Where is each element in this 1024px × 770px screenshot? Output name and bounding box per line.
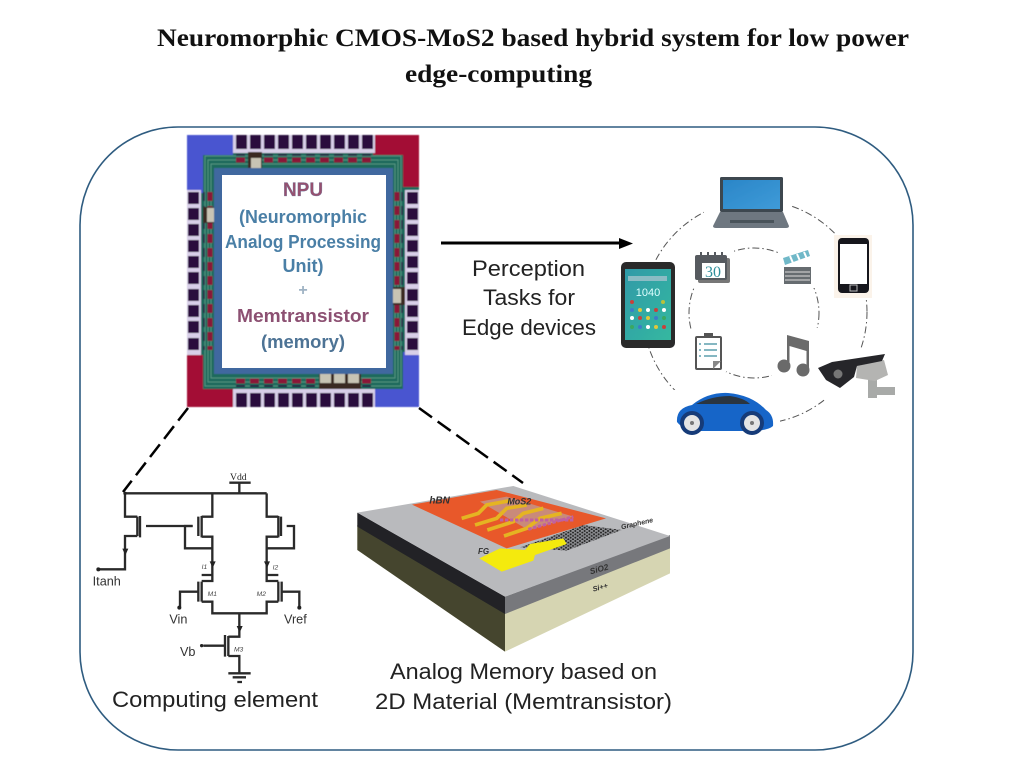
text: plus: + <box>298 282 308 299</box>
labels: I1 <box>202 564 208 571</box>
labels: M2 <box>257 591 266 598</box>
MoS2 array <box>462 497 573 536</box>
icon: tablet: 1040 <box>636 287 660 299</box>
wires <box>125 483 267 493</box>
dashed zoom line: to memtransistor <box>419 408 523 483</box>
icon: calendar: 30 <box>705 264 721 281</box>
text: neuromorphic analog processing unit <box>225 207 381 276</box>
top surface <box>357 486 670 597</box>
device labels: Graphene <box>621 517 654 531</box>
silicon substrate <box>357 513 670 652</box>
analog blocks <box>203 152 405 389</box>
device labels: MoS2 <box>507 496 531 506</box>
title <box>157 25 909 88</box>
labels: Vb <box>180 645 195 659</box>
text: neuromorphic analog processing unit: Unit) <box>282 256 324 276</box>
text: analog memory caption: Analog Memory based on <box>390 659 657 684</box>
blue core frame <box>214 168 393 374</box>
text: analog memory caption <box>375 659 672 714</box>
icon: laptop <box>704 170 792 232</box>
oxide layer <box>357 513 505 614</box>
labels: Vin <box>169 612 187 626</box>
icon: smartphone <box>834 235 872 298</box>
text: memory: (memory) <box>261 332 345 352</box>
device labels: SiO2 <box>589 562 610 576</box>
device labels <box>429 495 654 594</box>
title: edge-computing <box>405 61 593 88</box>
diagram: memtransistor device stack <box>357 486 670 652</box>
text: perception tasks label: Tasks for <box>483 285 575 310</box>
icon: calendar <box>690 246 734 288</box>
chip: NPU die layout <box>187 135 419 407</box>
edge device ring <box>643 200 867 424</box>
title: Neuromorphic CMOS-MoS2 based hybrid system for low power <box>157 25 909 52</box>
device labels: hBN <box>429 495 451 506</box>
chip: white centre with labels <box>222 175 386 368</box>
green guard rings <box>205 156 401 386</box>
text: perception tasks label: Edge devices <box>462 315 596 340</box>
I/O cells <box>210 160 397 381</box>
hBN flake <box>412 490 606 548</box>
text: computing element caption: Computing element <box>112 687 318 712</box>
text: neuromorphic analog processing unit: Analog Processing <box>225 232 381 252</box>
labels: M3 <box>234 646 244 653</box>
text: neuromorphic analog processing unit: (Neuromorphic <box>239 207 367 227</box>
device labels: Si++ <box>592 581 609 594</box>
bond pads <box>188 135 418 407</box>
labels <box>93 472 307 659</box>
device labels: FG <box>478 547 489 556</box>
icon: film clapper <box>778 246 816 288</box>
dashed zoom line: to computing element <box>123 408 188 492</box>
text: NPU: NPU <box>283 180 323 201</box>
corner pads <box>187 135 419 407</box>
icon: music notes <box>772 328 818 380</box>
icon: clipboard <box>688 330 726 372</box>
graphene <box>520 525 622 551</box>
periphery background <box>187 135 419 407</box>
icon: tablet <box>621 262 675 348</box>
icon: car <box>670 390 780 436</box>
arrow: chip to edge devices <box>441 238 633 249</box>
circuit: computing element schematic <box>93 472 307 682</box>
labels: M1 <box>208 591 217 598</box>
text: perception tasks label <box>462 256 596 340</box>
labels: I2 <box>273 564 279 571</box>
icon: security camera <box>812 350 895 400</box>
labels: Itanh <box>93 575 121 589</box>
text: memtransistor: Memtransistor <box>237 305 369 326</box>
text: analog memory caption: 2D Material (Memtransistor) <box>375 689 672 714</box>
arrows and dots <box>96 492 301 647</box>
text: perception tasks label: Perception <box>472 256 585 281</box>
labels: Vref <box>284 612 307 626</box>
labels: Vdd <box>230 472 247 483</box>
floating gate <box>479 538 567 572</box>
panel: rounded system border <box>80 127 913 750</box>
